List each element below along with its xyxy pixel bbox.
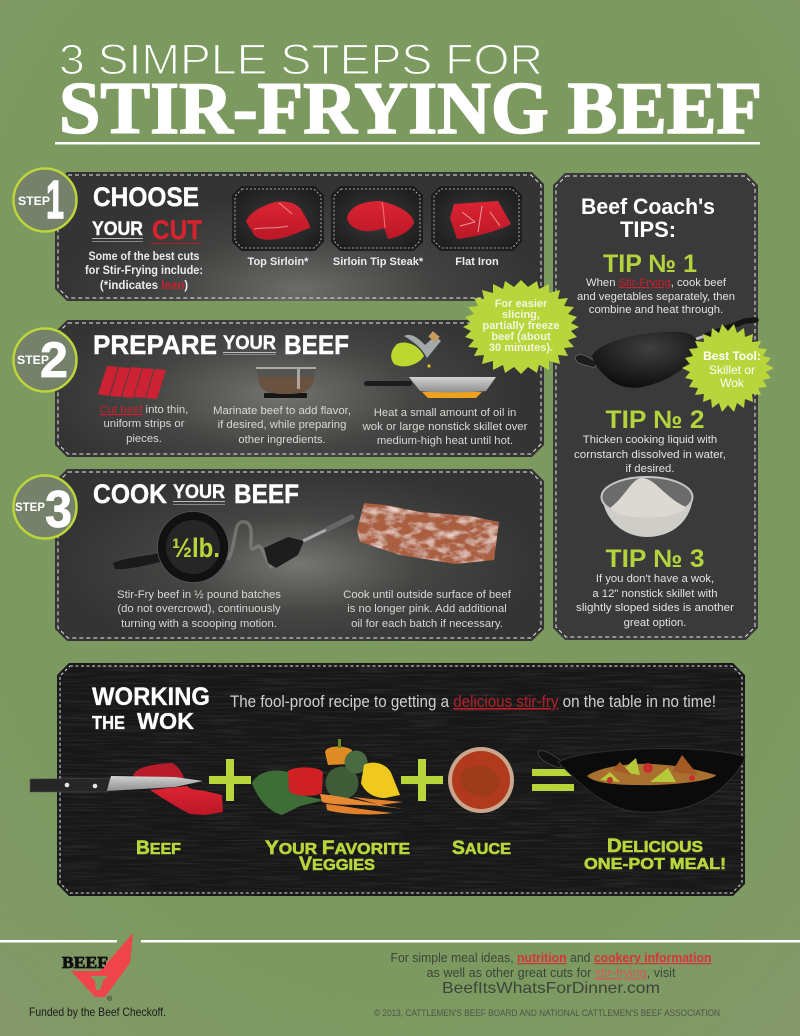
image: beef and knife <box>30 763 223 815</box>
heading: working the wok: THE <box>92 713 125 733</box>
logo: beef checkoff: Funded by the Beef Checkoff. <box>29 1005 166 1019</box>
icon: marinade bowl <box>256 367 316 398</box>
text: step 3 instructions: turning with a scooping motion. <box>121 618 277 630</box>
panel: step 3 cook your beef <box>55 469 544 641</box>
label: your favorite veggies: YOUR FAVORITE <box>265 838 410 859</box>
icon: half pound pan <box>113 512 228 582</box>
text: step 2 instructions: uniform strips or <box>104 418 185 430</box>
text: step 3 instructions: (do not overcrowd), continuously <box>117 603 281 615</box>
heading: choose your cut: YOUR <box>92 219 143 240</box>
panel: working the wok <box>30 663 745 896</box>
heading: prepare your beef <box>93 330 349 360</box>
heading: prepare your beef: PREPARE <box>93 330 217 360</box>
step 1 badge <box>14 168 76 232</box>
text: step 2 instructions: pieces. <box>126 433 162 445</box>
title: STIR-FRYING BEEF <box>59 68 762 150</box>
text: step 2 instructions: Cut beef into thin, <box>100 404 188 416</box>
heading: prepare your beef: BEEF <box>284 330 349 360</box>
text: step 2 instructions: if desired, while preparing <box>218 419 346 431</box>
label: your favorite veggies: VEGGIES <box>299 854 375 875</box>
tagline: The fool-proof recipe to getting a delicious stir-fry on the table in no time! <box>230 693 716 711</box>
heading: cook your beef: BEEF <box>234 479 299 509</box>
text: step 2 instructions <box>100 404 528 447</box>
callout: easier slicing: partially freeze <box>482 320 560 332</box>
step 2 badge: STEP <box>17 353 49 367</box>
cut thumbnail: sirloin tip <box>331 186 423 251</box>
label: beef: BEEF <box>136 838 181 859</box>
callout: best tool: Skillet or <box>709 363 755 377</box>
cut thumbnail: top sirloin <box>232 186 324 251</box>
footer rule <box>0 940 800 942</box>
callout: easier slicing: slicing, <box>502 309 540 321</box>
footer text: BeefItsWhatsForDinner.com <box>442 980 660 997</box>
title: 3 SIMPLE STEPS FOR <box>59 36 543 84</box>
callout: easier slicing: beef (about <box>491 331 551 343</box>
text: step 3 instructions: Stir-Fry beef in ½ pound batches <box>117 589 281 601</box>
text: step 2 instructions: other ingredients. <box>238 434 326 446</box>
text: step 3 instructions: is no longer pink. Add additional <box>347 603 507 615</box>
label: delicious one-pot meal: DELICIOUS <box>607 836 703 857</box>
icon: motion swirl <box>228 522 272 568</box>
heading: beef coach's tips <box>581 194 715 242</box>
heading: working the wok: WORKING <box>92 683 210 711</box>
panel: beef coach's tips <box>553 173 758 640</box>
step 2 badge <box>14 328 76 392</box>
heading: beef coach's tips: TIPS: <box>620 217 676 242</box>
cut labels: Top Sirloin* <box>248 256 309 268</box>
equals sign <box>532 769 574 791</box>
step 3 badge: 3 <box>45 481 72 539</box>
tip 1 <box>577 250 735 316</box>
cut thumbnail: flat iron <box>431 186 522 251</box>
text: step 3 instructions: Cook until outside surface of beef <box>343 589 512 601</box>
tip 3: slightly sloped sides is another <box>576 602 734 614</box>
text: intro: for Stir-Frying include: <box>85 265 203 277</box>
text: intro: (*indicates lean) <box>100 280 188 292</box>
icon: spatula <box>264 517 352 568</box>
heading: beef coach's tips: Beef Coach's <box>581 194 715 219</box>
panel: step 2 prepare your beef <box>55 320 544 457</box>
logo: beef checkoff: ® <box>107 995 113 1003</box>
step 1 badge: STEP <box>18 194 50 208</box>
tip 2: if desired. <box>626 463 674 475</box>
icon: wok <box>575 320 756 388</box>
label: delicious one-pot meal <box>584 836 726 873</box>
step 3 badge <box>14 476 76 539</box>
tip 2 <box>574 406 726 475</box>
label: your favorite veggies <box>265 838 410 875</box>
footer text: © 2013, CATTLEMEN'S BEEF BOARD AND NATIONAL CATTLEMEN'S BEEF ASSOCIATION <box>374 1008 720 1018</box>
heading: choose your cut <box>92 182 202 245</box>
footer text: For simple meal ideas, nutrition and cookery information <box>390 951 712 965</box>
icon: skillet with flame <box>364 377 496 398</box>
step 1 badge: 1 <box>46 170 64 230</box>
plus sign <box>401 759 443 801</box>
step 3 badge: STEP <box>15 500 45 514</box>
tip 1: When Stir-Frying, cook beef <box>586 277 727 289</box>
callout: easier slicing <box>463 280 579 374</box>
tip 2: TIP № 2 <box>606 406 704 434</box>
callout: best tool: Wok <box>720 376 745 390</box>
text: step 3 instructions <box>117 589 512 630</box>
footer text <box>374 951 720 1018</box>
icon: cornstarch bowl <box>602 477 693 537</box>
image: vegetables <box>252 739 410 815</box>
image: wok with stir-fry <box>538 748 745 812</box>
heading: cook your beef: YOUR <box>173 482 225 503</box>
tip 3: If you don't have a wok, <box>596 573 714 585</box>
callout: easier slicing: 30 minutes). <box>489 342 553 354</box>
callout: best tool: Best Tool: <box>703 349 761 363</box>
cut labels: Sirloin Tip Steak* <box>333 256 424 268</box>
text: step 2 instructions: Heat a small amount of oil in <box>374 407 516 419</box>
tip 1: and vegetables separately, then <box>577 291 735 303</box>
plus sign <box>209 759 251 801</box>
label: sauce: SAUCE <box>452 838 511 859</box>
heading: choose your cut: CHOOSE <box>93 182 199 212</box>
logo: beef checkoff <box>29 933 166 1019</box>
heading: cook your beef <box>93 479 299 509</box>
heading: working the wok: WOK <box>137 708 194 734</box>
tip 1: TIP № 1 <box>603 250 697 278</box>
step 2 badge: 2 <box>40 332 68 388</box>
tip 3: TIP № 3 <box>606 545 704 573</box>
tip 1: combine and heat through. <box>589 304 723 316</box>
heading: prepare your beef: YOUR <box>223 333 276 354</box>
tip 3: great option. <box>624 617 686 629</box>
text: intro: Some of the best cuts <box>88 251 200 263</box>
logo: beef checkoff: BEEF <box>62 953 108 972</box>
cut labels: Flat Iron <box>455 256 499 268</box>
tip 3: a 12" nonstick skillet with <box>592 588 718 600</box>
text: intro <box>85 251 203 292</box>
callout: best tool <box>682 324 774 412</box>
label: delicious one-pot meal: ONE-POT MEAL! <box>584 856 726 873</box>
image: sauce bowl <box>448 747 514 813</box>
cut labels <box>248 256 499 268</box>
icon: oil jug pouring <box>391 331 441 368</box>
panel: step 1 choose your cut <box>55 172 544 301</box>
text: step 3 instructions: oil for each batch if necessary. <box>351 618 503 630</box>
tip 2: Thicken cooking liquid with <box>583 434 717 446</box>
icon: beef strips <box>98 366 166 399</box>
icon: cooked beef <box>357 503 499 564</box>
text: step 2 instructions: medium-high heat until hot. <box>377 435 513 447</box>
icon: half pound pan: ½lb. <box>172 533 220 563</box>
text: step 2 instructions: Marinate beef to add flavor, <box>213 405 351 417</box>
heading: working the wok <box>92 683 210 734</box>
heading: cook your beef: COOK <box>93 479 167 509</box>
tip 2: cornstarch dissolved in water, <box>574 449 726 461</box>
callout: easier slicing: For easier <box>495 298 548 310</box>
heading: choose your cut: CUT <box>152 215 202 245</box>
footer text: as well as other great cuts for stir-frying, visit <box>426 966 676 980</box>
tip 3 <box>576 545 734 629</box>
text: step 2 instructions: wok or large nonstick skillet over <box>361 421 528 433</box>
